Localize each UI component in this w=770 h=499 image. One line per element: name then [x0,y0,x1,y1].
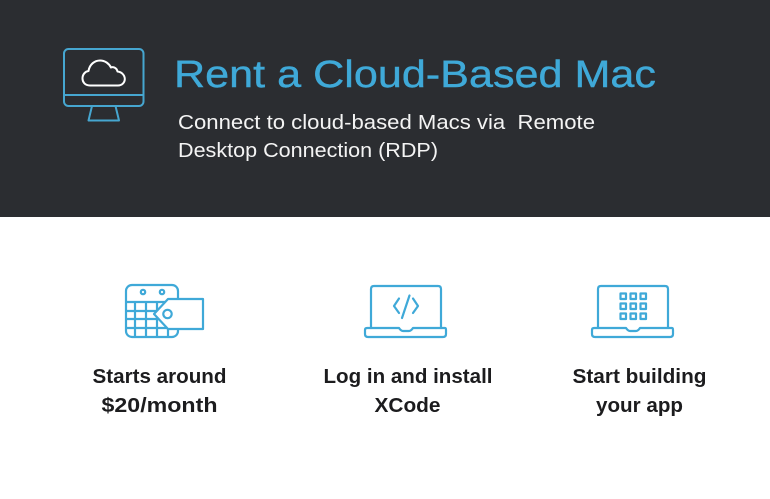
icon: laptop with app grid [592,286,673,337]
icon: monitor with cloud [64,49,144,120]
icon: laptop with code [365,286,446,337]
label: start building [572,365,706,417]
label: start building: Start building [572,365,706,388]
label: log in and install [324,365,492,417]
subtitle: Desktop Connection (RDP) [178,140,438,162]
header band [0,0,770,217]
subtitle [178,112,595,162]
label: start building: your app [596,394,683,417]
label: starts around: Starts around [92,365,227,388]
label: log in and install: XCode [374,394,440,417]
label: starts around [92,365,227,417]
title: Rent a Cloud-Based Mac [174,54,656,96]
icon: calendar with price tag [126,285,203,337]
label: log in and install: Log in and install [324,365,492,388]
subtitle: Connect to cloud-based Macs via Remote [178,112,595,134]
label: starts around: $20/month [102,394,218,417]
